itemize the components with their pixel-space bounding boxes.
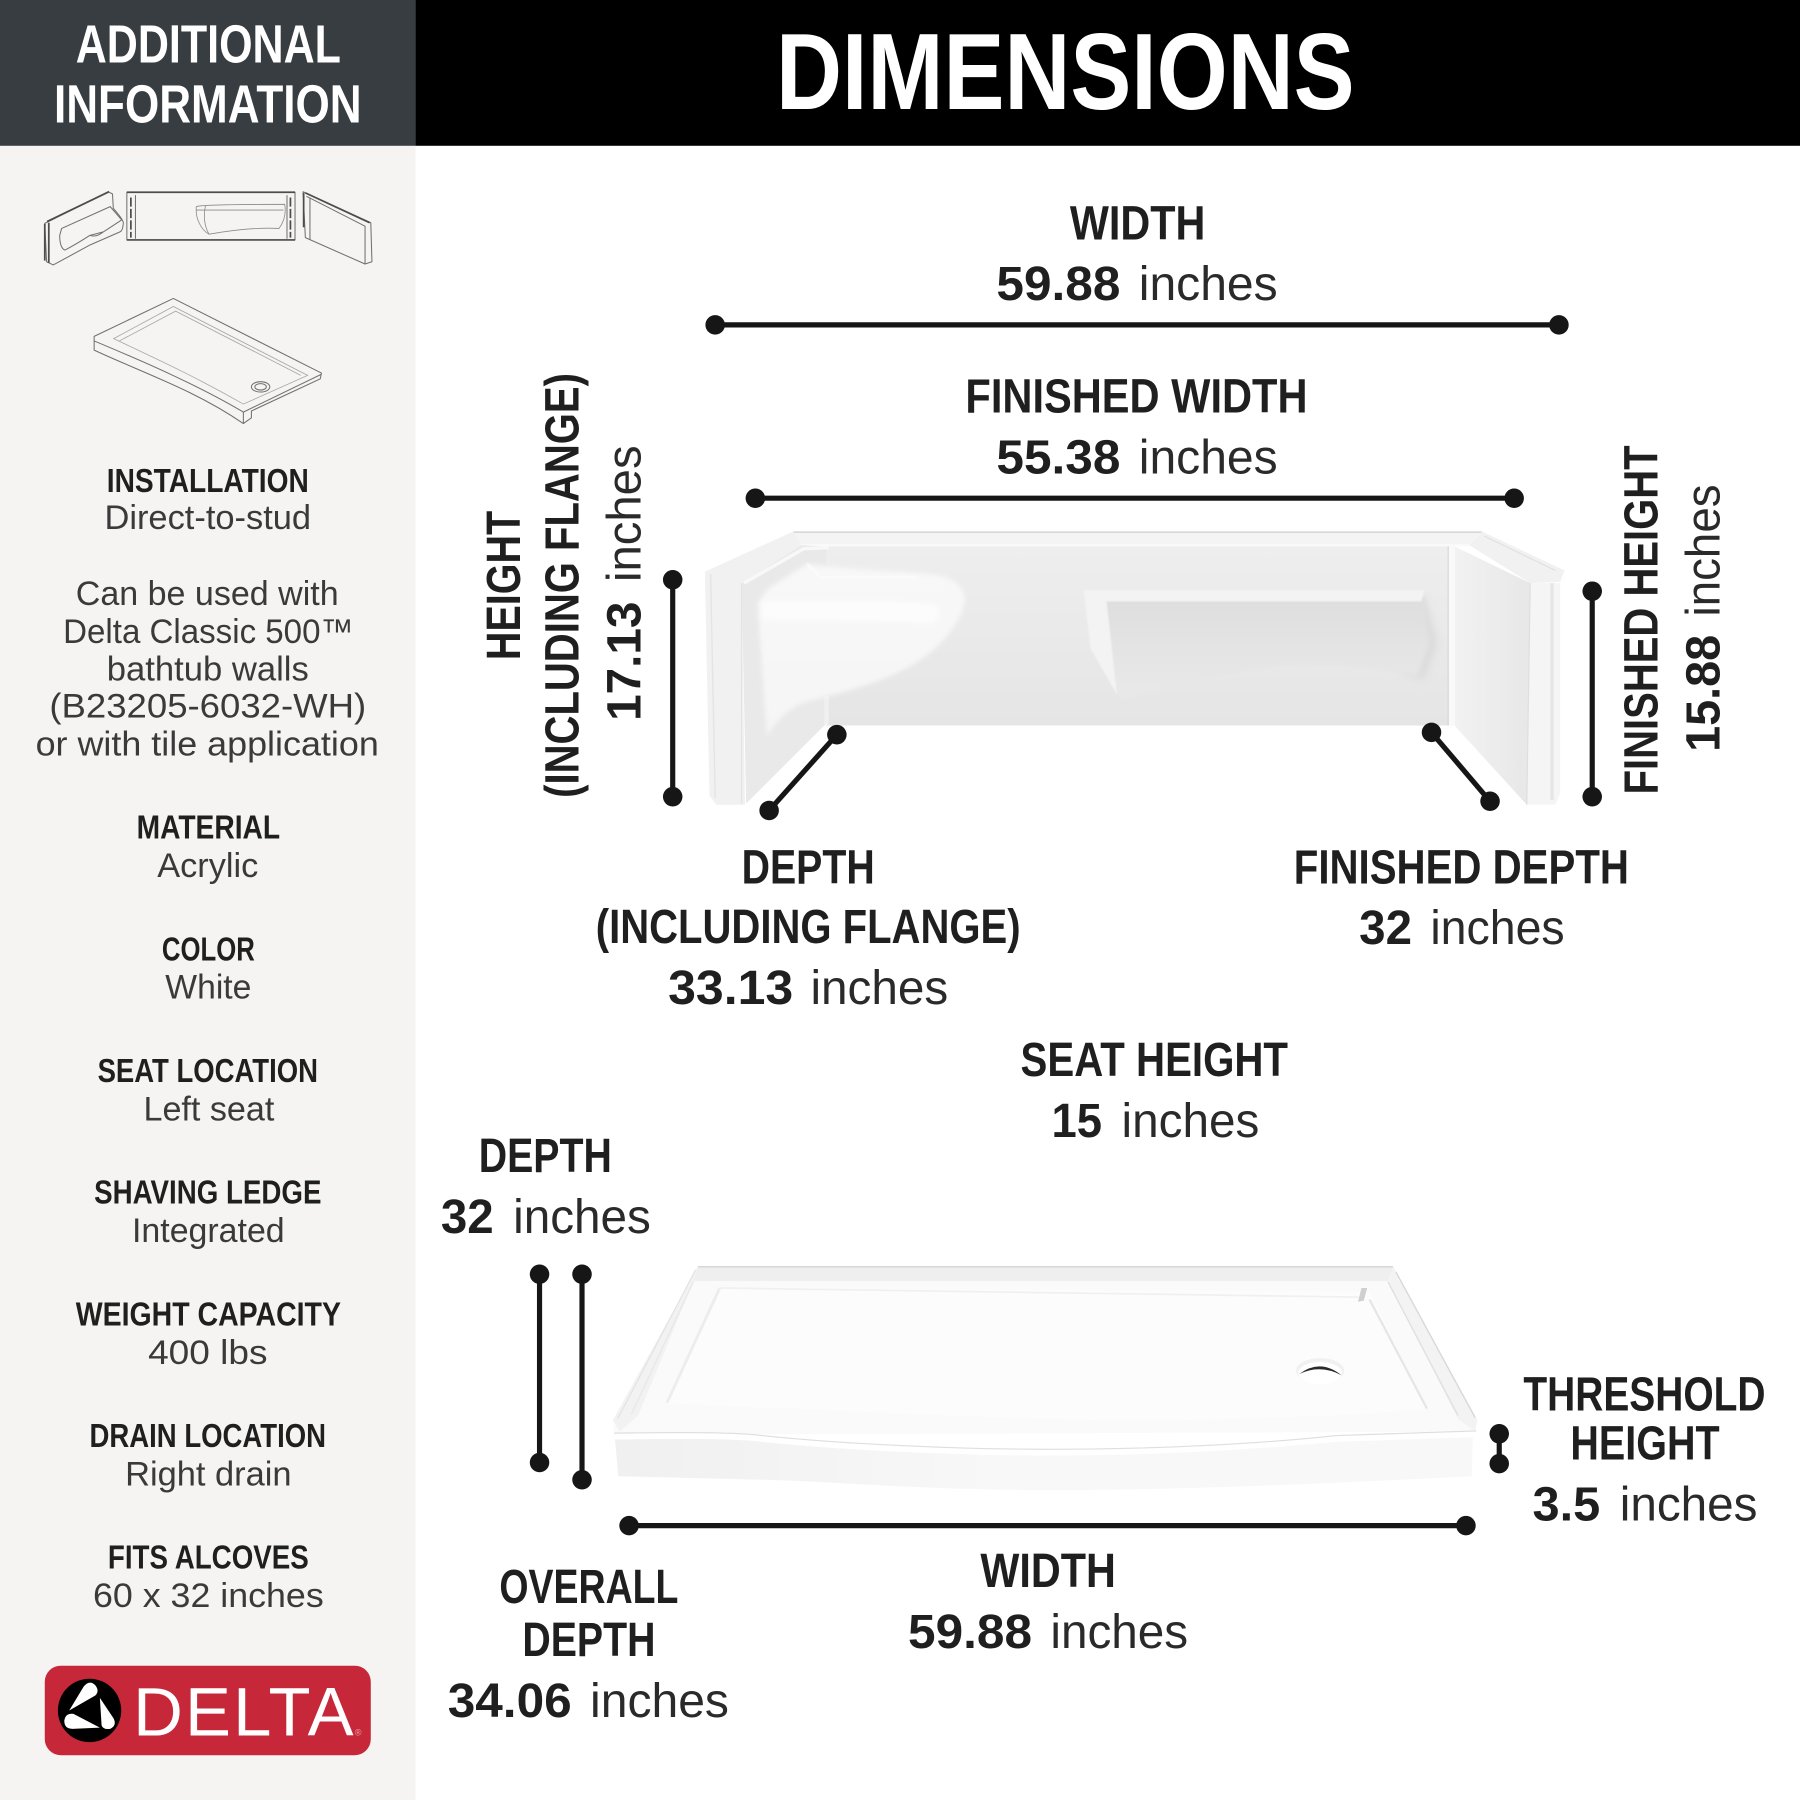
dimension: finished depth: inches: [1430, 901, 1565, 955]
logo: delta: DELTA: [133, 1674, 354, 1751]
dimension: base depth: 32: [441, 1190, 494, 1244]
spec: drain location: [90, 1418, 326, 1493]
top shelf: [793, 532, 1482, 545]
spec: weight capacity: 400 lbs: [148, 1334, 267, 1372]
dimension: threshold height: 3.5: [1533, 1477, 1600, 1531]
spec: fits alcoves: FITS ALCOVES: [108, 1540, 309, 1577]
dimension: width top: inches: [1139, 257, 1278, 311]
right corner post: [1449, 546, 1455, 726]
dimension: finished width: 55.38: [996, 431, 1120, 485]
dimension: finished height: 15.88: [1677, 635, 1731, 752]
dimension: overall depth: DEPTH: [522, 1613, 655, 1667]
dimension: depth including flange: 33.13: [668, 961, 793, 1015]
base deck: [613, 1266, 1477, 1435]
logo: delta: [45, 1666, 371, 1755]
dimension: height including flange: 17.13: [598, 602, 652, 721]
spec: color: COLOR: [162, 931, 255, 968]
dimension: finished depth: [1294, 723, 1629, 955]
spec: shaving ledge: [94, 1175, 321, 1250]
dimension: base width: 59.88: [908, 1605, 1032, 1659]
dimension: height including flange: HEIGHT: [477, 511, 531, 660]
spec: installation: [104, 463, 311, 537]
spec: fits alcoves: 60 x 32 inches: [93, 1577, 324, 1615]
dimension: finished height: [1582, 445, 1731, 806]
dimension: depth including flange: inches: [810, 961, 948, 1015]
dimension: finished width: [746, 370, 1524, 508]
spec: material: MATERIAL: [137, 810, 280, 847]
dimension: overall depth: [448, 1264, 729, 1728]
spec: shaving ledge: Integrated: [132, 1212, 285, 1250]
dimension: seat height: 15: [1052, 1094, 1102, 1148]
left wall piece: [45, 192, 123, 265]
sidebar header: additional information: [0, 0, 416, 146]
dimension: height including flange: inches: [598, 445, 652, 582]
spec: shaving ledge: SHAVING LEDGE: [94, 1175, 321, 1212]
sidebar header: additional information: ADDITIONAL: [76, 15, 341, 75]
title bar: dimensions: [416, 0, 1800, 146]
dimension: base width: inches: [1050, 1605, 1188, 1659]
dimension: finished width: FINISHED WIDTH: [965, 370, 1308, 424]
spec: drain location: Right drain: [125, 1455, 292, 1493]
dimension: depth including flange: (INCLUDING FLANGE): [596, 900, 1021, 954]
spec: installation: Direct-to-stud: [104, 499, 311, 537]
dimension: base depth: inches: [513, 1190, 651, 1244]
dimension: finished width: inches: [1139, 431, 1278, 485]
right rim: [1388, 1266, 1477, 1432]
molded seat: [758, 564, 965, 737]
right flange: [1527, 583, 1560, 805]
title bar: dimensions: DIMENSIONS: [776, 11, 1355, 133]
dimension: finished height: inches: [1677, 484, 1731, 616]
spec: seat location: SEAT LOCATION: [98, 1053, 318, 1090]
spec: color: [162, 931, 255, 1007]
sidebar panel background: [0, 146, 416, 1800]
dimension: depth including flange: DEPTH: [742, 840, 875, 894]
dimension: base width: WIDTH: [980, 1544, 1116, 1598]
spec: compatibility note: [36, 575, 379, 763]
spec: installation: INSTALLATION: [107, 463, 309, 500]
right wall piece: [303, 192, 372, 264]
dimension: overall depth: OVERALL: [499, 1560, 678, 1614]
photo: wall panels: [705, 532, 1565, 805]
dimension: height including flange: [477, 373, 682, 806]
spec: compatibility note: Can be used with: [76, 575, 339, 613]
dimension: width top: 59.88: [996, 257, 1120, 311]
spec: compatibility note: bathtub walls: [107, 651, 309, 689]
dimension: overall depth: inches: [590, 1674, 729, 1728]
dimension: threshold height: HEIGHT: [1570, 1417, 1720, 1471]
spec: drain location: DRAIN LOCATION: [90, 1418, 326, 1455]
dimension: seat height: SEAT HEIGHT: [1021, 1033, 1288, 1087]
dimension: threshold height: [1489, 1367, 1766, 1531]
spec: seat location: [98, 1053, 318, 1128]
dimension: height including flange: (INCLUDING FLANGE): [536, 373, 590, 798]
right top band: [1469, 532, 1565, 583]
spec: compatibility note: (B23205-6032-WH): [49, 687, 366, 725]
basin floor: [667, 1288, 1427, 1420]
left flange: [705, 572, 745, 805]
dimension: overall depth: 34.06: [448, 1674, 572, 1728]
spec: fits alcoves: [93, 1540, 324, 1615]
dimension: finished height: FINISHED HEIGHT: [1615, 445, 1669, 794]
dimension: base depth: DEPTH: [479, 1129, 612, 1183]
middle wall piece: [127, 192, 295, 240]
dimension: finished depth: 32: [1359, 901, 1412, 955]
spec: compatibility note: Delta Classic 500™: [63, 613, 354, 651]
dimension: threshold height: inches: [1620, 1477, 1758, 1531]
spec: color: White: [165, 969, 251, 1007]
spec: material: [137, 810, 280, 885]
icon: line drawing of shower base: [94, 298, 321, 424]
drain: [1296, 1358, 1344, 1383]
dimension: width top: WIDTH: [1070, 196, 1205, 250]
dimension: width top: [705, 196, 1569, 335]
front lip: [614, 1432, 1476, 1456]
dimension: finished depth: FINISHED DEPTH: [1294, 840, 1629, 894]
left top band: [705, 532, 801, 583]
front apron: [615, 1437, 1473, 1490]
left side panel: [742, 545, 827, 804]
back rim: [693, 1266, 1393, 1282]
sidebar header: additional information: INFORMATION: [54, 74, 362, 134]
dimension: depth including flange: [596, 725, 1021, 1015]
dimension: seat height: inches: [1122, 1094, 1259, 1148]
right side panel: [1454, 546, 1530, 805]
dimension: base width: [619, 1516, 1476, 1659]
spec: material: Acrylic: [157, 847, 258, 885]
logo: delta: ®: [355, 1728, 362, 1738]
spec: seat location: Left seat: [143, 1090, 275, 1128]
photo: shower base: [613, 1266, 1477, 1490]
left rim: [613, 1266, 698, 1432]
dimension: seat height: [1021, 1033, 1288, 1148]
dimension: base depth: [441, 1129, 651, 1489]
back wall: [827, 545, 1454, 726]
icon: line drawing of wall panels: [45, 192, 372, 265]
spec: compatibility note: or with tile application: [36, 725, 379, 763]
spec: weight capacity: [76, 1296, 341, 1372]
shaving ledge: [1084, 590, 1437, 699]
spec: weight capacity: WEIGHT CAPACITY: [76, 1296, 341, 1333]
